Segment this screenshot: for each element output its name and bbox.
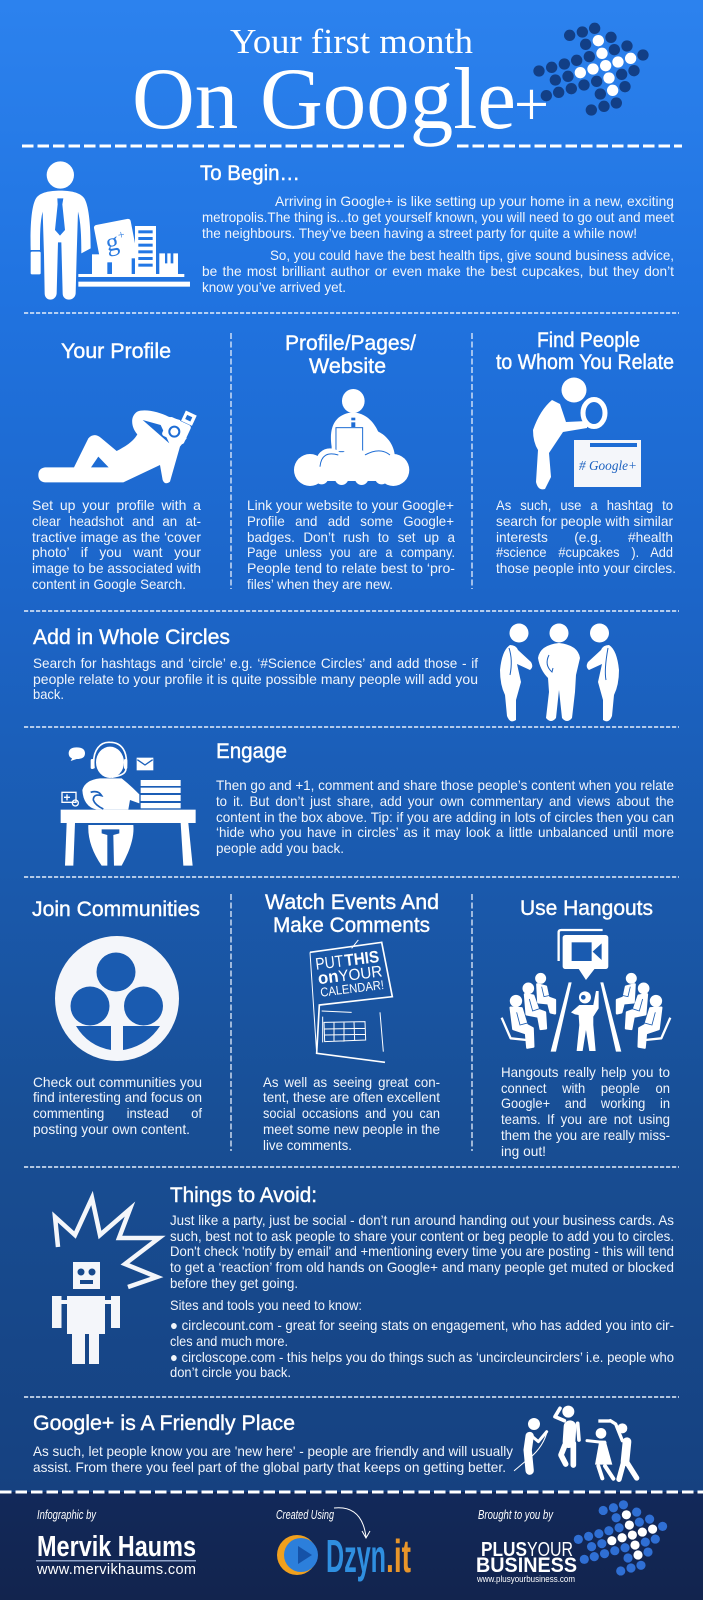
text block: use hangouts: connect with people on: [501, 1080, 670, 1096]
text block: watch events: As well as seeing great con-: [263, 1074, 440, 1090]
text block: use hangouts: Google+ and working in: [501, 1095, 670, 1111]
icon: dotted plus arrow logo: [533, 23, 649, 116]
heading: Things to Avoid: Things to Avoid:: [170, 1184, 317, 1207]
title: On Google+: +: [514, 71, 549, 139]
text block: engage: [216, 777, 674, 856]
text block: things to avoid: ● circloscope.com - this helps you do things such as ‘uncircleuncirclers’ i.e. people who: [170, 1349, 674, 1365]
text block: join communities: Check out communities you: [33, 1074, 202, 1090]
text block: use hangouts: [501, 1064, 670, 1159]
heading: Join Communities: Join Communities: [32, 898, 200, 921]
text block: intro: So, you could have the best health tips, give sound business advice,: [270, 247, 674, 263]
footer credit: Dzyn.it: [276, 1507, 411, 1582]
text block: intro: the neighbours. They’ve been having a street party for quite a while now!: [202, 225, 637, 241]
icon: calendar poster: on: [317, 966, 340, 988]
text block: your profile: Set up your profile with a: [32, 497, 201, 513]
icon: three people talking: [500, 624, 619, 721]
title: Your first month: Your first month: [230, 22, 474, 61]
icon: man with magnifier and search box: # Google+: [579, 459, 637, 474]
text block: things to avoid: ● circlecount.com - great for seeing stats on engagement, who has added you into cir-: [170, 1317, 674, 1333]
text block: your profile: image to be associated with: [32, 560, 201, 576]
heading: Profile/Pages/Website: Website: [309, 355, 386, 378]
text block: your profile: tractive image as the ‘cover: [32, 529, 201, 545]
heading: Watch Events And Make Comments: Watch Events And: [265, 891, 439, 914]
text block: join communities: find interesting and focus on: [33, 1089, 202, 1105]
icon: hangouts video call group: [502, 930, 670, 1052]
icon: businessman and city: +: [116, 227, 126, 242]
footer credit: Dzyn.it: Created Using: [276, 1507, 335, 1522]
text block: profile pages website: Link your website to your Google+: [247, 497, 454, 513]
text block: watch events: [263, 1074, 440, 1153]
text block: profile pages website: files’ when they are new.: [247, 576, 393, 592]
text block: things to avoid: Sites and tools you need to know:: [170, 1297, 362, 1313]
footer credit: Mervik Haums: www.mervikhaums.com: [36, 1562, 196, 1578]
text block: friendly place: assist. From there you feel part of the global party that keeps on getting better.: [33, 1459, 506, 1475]
icon: footer dotted plus logo: [574, 1500, 667, 1576]
footer band: [0, 1492, 703, 1600]
footer credit: Plus Your Business: www.plusyourbusiness.com: [476, 1574, 575, 1584]
text block: add in whole circles: [33, 655, 478, 702]
text block: profile pages website: Page unless you are a company.: [247, 544, 455, 560]
heading: Engage: Engage: [216, 740, 287, 763]
footer credit: Mervik Haums: Mervik Haums: [37, 1531, 196, 1563]
text block: find people: [496, 497, 676, 576]
footer credit: Plus Your Business: Brought to you by: [478, 1507, 554, 1522]
heading: Use Hangouts: Use Hangouts: [520, 897, 653, 920]
icon: reclining man with camera: [38, 410, 197, 483]
footer credit: Plus Your Business: YOUR: [527, 1539, 573, 1561]
icon: businessman and city: g: [103, 227, 121, 258]
text block: things to avoid: Don't check 'notify by email' and +mentioning every time you are posting - this will tend: [170, 1243, 674, 1259]
text block: use hangouts: teams. If you are not using: [501, 1111, 670, 1127]
text block: things to avoid: Just like a party, just be social - don’t run around handing out your business cards. As: [170, 1212, 674, 1228]
text block: add in whole circles: people relate to your profile it is quite possible many people will add you: [33, 671, 478, 687]
footer credit: Dzyn.it: Dzyn: [326, 1530, 386, 1582]
text block: profile pages website: People tend to relate best to ‘pro-: [247, 560, 455, 576]
icon: people partying: [514, 1406, 637, 1479]
heading: Find People to Whom You Relate: [496, 329, 674, 374]
text block: things to avoid: before they get going.: [170, 1275, 298, 1291]
text block: engage: ‘hide who you have in circles’ as it may look a little unbalanced until more: [216, 824, 674, 840]
text block: your profile: clear headshot and an at-: [32, 513, 201, 529]
footer credit: Plus Your Business: [476, 1500, 667, 1584]
text block: things to avoid: [170, 1212, 674, 1380]
icon: person with laptop on cloud: [294, 389, 409, 486]
heading: Google+ is A Friendly Place: Google+ is A Friendly Place: [33, 1412, 295, 1435]
heading: To Begin: To Begin…: [200, 162, 300, 185]
icon: calendar poster: [310, 940, 392, 1062]
text block: things to avoid: don’t circle you back.: [170, 1364, 291, 1380]
text block: join communities: [33, 1074, 202, 1137]
footer credit: Dzyn.it: .it: [386, 1530, 411, 1582]
text block: things to avoid: cles and much more.: [170, 1333, 288, 1349]
icon: calendar poster: THIS: [343, 947, 380, 970]
text block: join communities: commenting instead of: [33, 1105, 202, 1121]
text block: find people: #science #cupcakes ). Add: [496, 544, 673, 560]
text block: watch events: social occasions and you can: [263, 1105, 440, 1121]
heading: Profile/Pages/Website: Profile/Pages/: [285, 332, 416, 355]
icon: businessman and city: [31, 161, 190, 300]
icon: calendar poster: YOUR: [338, 963, 383, 986]
text block: add in whole circles: Search for hashtags and ‘circle’ e.g. ‘#Science Circles’ and add those - if: [33, 655, 478, 671]
heading: Your Profile: Your Profile: [61, 340, 171, 363]
text block: watch events: meet some new people in the: [263, 1121, 440, 1137]
text block: friendly place: [33, 1443, 513, 1475]
footer credit: Mervik Haums: Infographic by: [37, 1507, 97, 1522]
text block: engage: people add you back.: [216, 840, 344, 856]
footer credit: Mervik Haums: [36, 1507, 196, 1578]
text block: friendly place: As such, let people know you are 'new here' - people are friendly and will usually: [33, 1443, 513, 1459]
text block: engage: Then go and +1, comment and share those people’s content when you relate: [216, 777, 674, 793]
title: On Google+: On Google: [132, 51, 516, 148]
text block: find people: those people into your circles.: [496, 560, 676, 576]
heading: Find People to Whom You Relate: to Whom You Relate: [496, 351, 674, 374]
heading: Watch Events And Make Comments: Make Comments: [273, 914, 430, 937]
icon: calendar poster: CALENDAR!: [319, 978, 385, 1000]
icon: communities circle: [55, 936, 179, 1061]
text block: use hangouts: ing out!: [501, 1143, 546, 1159]
text block: intro: metropolis.The thing is...to get yourself known, you will need to go out and meet: [202, 209, 674, 225]
heading: Watch Events And Make Comments: [265, 891, 439, 937]
heading: Find People to Whom You Relate: Find People: [537, 329, 640, 352]
text block: your profile: photo’ if you want your: [32, 544, 201, 560]
text block: profile pages website: [247, 497, 455, 592]
text block: engage: to it. But don’t just share, add your own commentary and views about the: [216, 793, 674, 809]
footer credit: Plus Your Business: BUSINESS: [476, 1554, 577, 1577]
icon: shocked robot: [52, 1198, 159, 1364]
icon: man with magnifier and search box: [533, 378, 641, 489]
text block: use hangouts: them the you are really miss-: [501, 1127, 670, 1143]
text block: your profile: content in Google Search.: [32, 576, 186, 592]
text block: things to avoid: to get a ‘reaction’ from old hands on Google+ and many people get muted or blocked: [170, 1259, 674, 1275]
icon: calendar poster: PUT: [314, 951, 344, 974]
icon: person at desk with headset: [61, 742, 196, 866]
text block: find people: search for people with similar: [496, 513, 673, 529]
text block: find people: interests (e.g. #health: [496, 529, 673, 545]
heading: Profile/Pages/Website: [285, 332, 416, 378]
text block: intro: know you’ve arrived yet.: [202, 279, 346, 295]
text block: watch events: tent, these are often excellent: [263, 1089, 440, 1105]
text block: intro: [202, 193, 674, 295]
text block: intro: be the most brilliant author or even make the best cupcakes, but they don’t: [202, 263, 674, 279]
text block: watch events: live comments.: [263, 1137, 352, 1153]
text block: use hangouts: Hangouts really help you to: [501, 1064, 670, 1080]
text block: profile pages website: badges. Don’t rush to set up a: [247, 529, 455, 545]
heading: Add in Whole Circles: Add in Whole Circles: [33, 626, 230, 649]
text block: find people: As such, use a hashtag to: [496, 497, 673, 513]
text block: your profile: [32, 497, 201, 592]
text block: add in whole circles: back.: [33, 686, 64, 702]
text block: things to avoid: such, best not to ask people to share your content or beg people to add you to circles.: [170, 1228, 674, 1244]
text block: engage: content in the box above. Tip: if you are adding in lots of circles then you can: [216, 809, 674, 825]
text block: join communities: posting your own content.: [33, 1121, 190, 1137]
text block: intro: Arriving in Google+ is like setting up your home in a new, exciting: [275, 193, 674, 209]
text block: profile pages website: Profile and add some Google+: [247, 513, 454, 529]
footer credit: Plus Your Business: PLUS: [481, 1539, 527, 1561]
